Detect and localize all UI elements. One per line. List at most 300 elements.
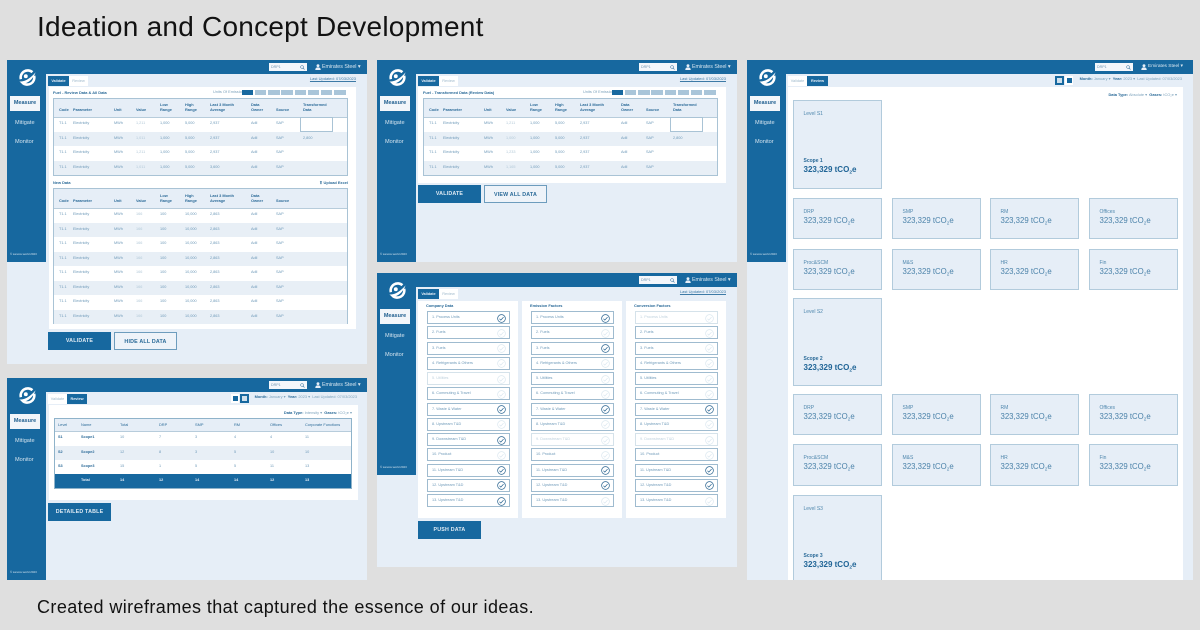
units of emission selector	[583, 89, 716, 95]
sidebar navigation: Measure	[384, 313, 406, 319]
column: emission factors: 2. Fuels	[536, 330, 550, 334]
table: review data: Average	[210, 107, 225, 112]
table: review data: Range	[160, 107, 172, 112]
section heading: new data: New Data	[53, 180, 71, 185]
column: emission factors: 13. Upstream T&D	[536, 498, 567, 502]
sidebar navigation: © sanora world 2023	[380, 465, 407, 469]
table: new data: 166	[136, 284, 142, 288]
column: conversion factors: 1. Process Units	[640, 315, 668, 319]
table: new data: 10,000	[185, 299, 197, 303]
sidebar navigation: Mitigate	[385, 120, 405, 126]
table: transformed data: Range	[530, 107, 542, 112]
table: emissions by scope: RM	[234, 422, 240, 427]
table: review data: Adil	[251, 164, 257, 168]
table: review data: 2,800	[303, 136, 313, 140]
table: review data: Transformed	[303, 102, 327, 107]
column: company data: 6. Commuting & Travel	[432, 391, 471, 395]
table: emissions by scope: 8	[159, 450, 161, 454]
table: new data: Electricity	[73, 270, 89, 274]
table: review data: 1,000	[160, 121, 170, 125]
view toggle icons	[231, 394, 249, 403]
white content card	[418, 87, 726, 183]
table: new data: Adil	[251, 226, 257, 230]
column: company data: 2. Fuels	[432, 330, 446, 334]
table: review data: 1,000	[160, 164, 170, 168]
table: emissions by scope: 4	[234, 435, 236, 439]
card: Offices: 323,329 tCO2e	[1100, 216, 1151, 226]
upload excel link: ⬆ Upload Excel	[319, 180, 348, 185]
card: DRP	[793, 394, 882, 435]
sidebar navigation: Measure	[14, 100, 36, 106]
table: emissions by scope: 14	[120, 478, 124, 482]
table: review data: 1,011	[136, 136, 145, 140]
column: company data: 9. Downstream T&D	[432, 437, 466, 441]
table: emissions by scope: 11	[305, 435, 309, 439]
table: new data: Electricity	[73, 284, 89, 288]
card: SMP: SMP	[902, 405, 913, 411]
card: level s1 scope 1: Scope 1	[804, 158, 823, 164]
detailed table button	[48, 503, 111, 521]
table: new data: 100	[160, 256, 166, 260]
table: emissions by scope: 13	[305, 464, 309, 468]
table: new data: Low	[160, 193, 168, 198]
table: review data: Last 3 Month	[210, 102, 234, 107]
card: Fin: Fin	[1100, 260, 1106, 266]
table: review data: 5,000	[185, 136, 195, 140]
table: emissions by scope: 14	[195, 478, 199, 482]
table: transformed data	[423, 98, 718, 176]
column: emission factors: 11. Upstream T&D	[536, 468, 567, 472]
tabs	[48, 394, 87, 404]
column: company data: 8. Upstream T&D	[432, 422, 461, 426]
table: new data: 100	[160, 270, 166, 274]
table: review data: 3,600	[210, 164, 220, 168]
card: RM: RM	[1000, 405, 1008, 411]
card: level s1 scope 1: Level S1	[804, 111, 823, 117]
card: DRP: DRP	[804, 209, 814, 215]
table: new data: MWh	[114, 314, 123, 318]
table: emissions by scope: 10	[270, 450, 274, 454]
table: new data: 10,000	[185, 270, 197, 274]
card: Fin	[1089, 444, 1178, 486]
table: review data: Data	[303, 107, 311, 112]
tabs	[418, 289, 458, 299]
table: transformed data: High	[555, 102, 564, 107]
table: new data: 166	[136, 299, 142, 303]
table: transformed data: Value	[506, 107, 516, 112]
tabs: Review	[72, 79, 85, 83]
column: conversion factors: 2. Fuels	[640, 330, 654, 334]
table: review data: MWh	[114, 121, 123, 125]
table: new data: Adil	[251, 284, 257, 288]
table: new data: Adil	[251, 241, 257, 245]
table: transformed data: MWh	[484, 150, 493, 154]
card: DRP: 323,329 tCO2e	[804, 412, 855, 422]
column: company data: 13. Upstream T&D	[432, 498, 463, 502]
top bar: DRP1	[271, 64, 281, 68]
column: conversion factors: 12. Upstream T&D	[640, 483, 671, 487]
table: emissions by scope: 15	[120, 464, 124, 468]
table: new data: 100	[160, 284, 166, 288]
top bar	[7, 60, 367, 74]
table: transformed data: Average	[580, 107, 595, 112]
card: Fin: Fin	[1100, 455, 1106, 461]
tabs: Validate	[51, 397, 64, 401]
table: emissions by scope: S2	[58, 450, 63, 454]
table: review data: 2,937	[210, 136, 220, 140]
tabs: Validate	[421, 79, 436, 83]
table: review data: 5,000	[185, 150, 195, 154]
table: new data: 166	[136, 212, 142, 216]
table: new data: 100	[160, 226, 166, 230]
table: transformed data: 5,000	[555, 164, 565, 168]
view all data button	[484, 185, 547, 203]
last updated: Last Updated: 07/03/2023	[680, 289, 726, 294]
column: company data: 3. Fuels	[432, 346, 446, 350]
tabs	[418, 76, 458, 86]
table: transformed data: Last 3 Month	[580, 102, 604, 107]
sidebar navigation	[377, 273, 416, 475]
top bar: Emirates Steel ▾	[692, 64, 731, 70]
table: new data: Adil	[251, 256, 257, 260]
table: emissions by scope: 1	[159, 464, 161, 468]
table: transformed data: Adil	[621, 121, 627, 125]
table: review data: SAP	[276, 150, 284, 154]
table: transformed data: Adil	[621, 150, 627, 154]
table: transformed data: 2,937	[580, 164, 590, 168]
card: M&S: M&S	[902, 260, 913, 266]
table: transformed data: Electricity	[443, 150, 459, 154]
column: conversion factors: 6. Commuting & Travel	[640, 391, 679, 395]
table: transformed data: Range	[555, 107, 567, 112]
table: new data: 100	[160, 314, 166, 318]
table: transformed data: Electricity	[443, 121, 459, 125]
table: new data: 2,863	[210, 241, 220, 245]
top bar: DRP1	[1097, 64, 1107, 68]
column: company data: 12. Upstream T&D	[432, 483, 463, 487]
sidebar navigation: Monitor	[15, 139, 34, 145]
table: transformed data: Code	[429, 107, 439, 112]
table: new data: Owner	[251, 198, 263, 203]
card: M&S: M&S	[902, 455, 913, 461]
table: emissions by scope: 5	[234, 450, 236, 454]
table: transformed data: 1,233	[506, 150, 516, 154]
panel: scope cards wireframe	[747, 60, 1193, 580]
table: new data: Adil	[251, 299, 257, 303]
sidebar navigation: Measure	[754, 100, 776, 106]
table: review data: Data	[251, 102, 259, 107]
validate button	[48, 332, 111, 350]
table: review data: Electricity	[73, 136, 89, 140]
table: review data: Parameter	[73, 107, 92, 112]
table: new data: Electricity	[73, 226, 89, 230]
sidebar navigation: © sanora world 2023	[10, 570, 37, 574]
column: company data: Company Data	[426, 303, 453, 308]
table: review data: 1,211	[136, 150, 145, 154]
table: transformed data: Data	[673, 107, 681, 112]
table: emissions by scope	[54, 418, 352, 489]
table: review data: Electricity	[73, 150, 89, 154]
table: new data: 10,000	[185, 256, 197, 260]
table: transformed data: T1.1	[429, 136, 437, 140]
table: transformed data: T1.1	[429, 121, 437, 125]
card: RM	[990, 198, 1079, 239]
table: review data: Unit	[114, 107, 122, 112]
column: conversion factors: 9. Downstream T&D	[640, 437, 674, 441]
table: emissions by scope: Scope2	[81, 450, 95, 454]
table: new data: 10,000	[185, 314, 197, 318]
table: transformed data: Parameter	[443, 107, 462, 112]
table: new data: 2,863	[210, 314, 220, 318]
table: review data: T1.1	[59, 150, 67, 154]
table: review data: MWh	[114, 136, 123, 140]
table: review data: T1.1	[59, 164, 67, 168]
table: new data: MWh	[114, 212, 123, 216]
table: review data: 5,000	[185, 164, 195, 168]
top bar: Emirates Steel ▾	[692, 277, 731, 283]
card: HR	[990, 444, 1079, 486]
table: transformed data: 5,000	[555, 136, 565, 140]
table: review data: 371	[303, 121, 309, 125]
card: M&S: 323,329 tCO2e	[902, 462, 954, 472]
sidebar navigation	[747, 60, 786, 262]
card: DRP	[793, 198, 882, 239]
table: transformed data: Source	[646, 107, 659, 112]
table: transformed data: 2,800	[673, 136, 683, 140]
top bar: DRP1	[271, 382, 281, 386]
table: emissions by scope: SMP	[195, 422, 203, 427]
table: transformed data: MWh	[484, 136, 493, 140]
panel: fuel review data and all data wireframe	[7, 60, 367, 364]
table: new data: Unit	[114, 198, 122, 203]
column: company data: 7. Waste & Water	[432, 406, 461, 410]
card: RM: 323,329 tCO2e	[1000, 216, 1052, 226]
card: HR: HR	[1000, 260, 1008, 266]
card: M&S	[892, 249, 981, 290]
table: review data: Adil	[251, 150, 257, 154]
card: SMP: SMP	[902, 209, 913, 215]
card: level s1 scope 1: 323,329 tCO2e	[804, 165, 856, 176]
tabs	[48, 76, 88, 86]
table: new data: SAP	[276, 241, 284, 245]
sidebar navigation	[377, 60, 416, 262]
table: new data: SAP	[276, 256, 284, 260]
card: SMP: 323,329 tCO2e	[902, 216, 954, 226]
card: level s2 scope 2	[793, 298, 882, 386]
column: conversion factors	[626, 301, 726, 518]
table: new data: T1.1	[59, 284, 67, 288]
table: new data: Electricity	[73, 299, 89, 303]
table: transformed data: SAP	[646, 121, 654, 125]
card: Offices	[1089, 198, 1178, 239]
table: new data: 166	[136, 256, 142, 260]
table: transformed data: 1,211	[506, 121, 515, 125]
table: new data: SAP	[276, 314, 284, 318]
column: company data: 11. Upstream T&D	[432, 468, 463, 472]
table: transformed data: 2,937	[580, 136, 590, 140]
panel: review summary table wireframe	[7, 378, 367, 580]
column: emission factors: 10. Product	[536, 452, 555, 456]
table: review data: T1.1	[59, 121, 67, 125]
table: transformed data: 1,000	[530, 164, 540, 168]
table: transformed data: Low	[530, 102, 538, 107]
table: review data: T1.1	[59, 136, 67, 140]
card: SMP: 323,329 tCO2e	[902, 412, 954, 422]
column: conversion factors: 3. Fuels	[640, 346, 654, 350]
card: level s3 scope 3: Level S3	[804, 506, 823, 512]
table: review data: 5,000	[185, 121, 195, 125]
column: conversion factors: 11. Upstream T&D	[640, 468, 671, 472]
sidebar navigation: Monitor	[755, 139, 774, 145]
table: new data: Value	[136, 198, 146, 203]
table: review data: 1,000	[160, 136, 170, 140]
card: Fin: 323,329 tCO2e	[1100, 462, 1151, 472]
table: emissions by scope: 12	[120, 450, 124, 454]
table: emissions by scope: 3	[195, 450, 197, 454]
top bar: Emirates Steel ▾	[1148, 64, 1183, 69]
table: emissions by scope: Scope1	[81, 435, 95, 439]
table: transformed data: Data	[621, 102, 629, 107]
table: new data: SAP	[276, 212, 284, 216]
table: new data: Electricity	[73, 241, 89, 245]
table: new data: Parameter	[73, 198, 92, 203]
table: transformed data: 1,165	[506, 164, 516, 168]
table: emissions by scope: Name	[81, 422, 91, 427]
table: new data: Source	[276, 198, 289, 203]
table: review data: Source	[276, 107, 289, 112]
column: conversion factors: Conversion Factors	[634, 303, 671, 308]
sidebar navigation: © sanora world 2023	[750, 252, 777, 256]
table: emissions by scope: 5	[234, 464, 236, 468]
table: emissions by scope: 13	[305, 478, 309, 482]
table: review data: High	[185, 102, 194, 107]
card: Proc&SCM	[793, 249, 882, 290]
table: emissions by scope: Total	[81, 478, 90, 482]
card: M&S	[892, 444, 981, 486]
table: transformed data: 1,000	[530, 121, 540, 125]
table: new data: 166	[136, 314, 142, 318]
card: Fin: 323,329 tCO2e	[1100, 267, 1151, 276]
table: review data: Low	[160, 102, 168, 107]
column: conversion factors: 10. Product	[640, 452, 659, 456]
card: M&S: 323,329 tCO2e	[902, 267, 954, 276]
table: new data: SAP	[276, 284, 284, 288]
title: Ideation and Concept Development	[37, 11, 484, 42]
table: emissions by scope: 10	[120, 435, 124, 439]
table: new data: 2,863	[210, 256, 220, 260]
table: review data: SAP	[276, 121, 284, 125]
data type and gases filters: Data Type: Absolute ▾ Gases: tCO₂e ▾	[1108, 92, 1177, 97]
table: new data: 10,000	[185, 241, 197, 245]
table: transformed data: SAP	[646, 136, 654, 140]
sidebar navigation: Measure	[14, 418, 36, 424]
table: new data	[53, 188, 348, 324]
table: new data: MWh	[114, 299, 123, 303]
card: Offices: 323,329 tCO2e	[1100, 412, 1151, 422]
column: emission factors: 1. Process Units	[536, 315, 564, 319]
column: emission factors: 6. Commuting & Travel	[536, 391, 575, 395]
table: review data: MWh	[114, 150, 123, 154]
table: new data: 2,863	[210, 226, 220, 230]
table: transformed data: T1.1	[429, 164, 437, 168]
sidebar navigation: Monitor	[15, 457, 34, 463]
table: new data: Code	[59, 198, 69, 203]
card: Fin	[1089, 249, 1178, 290]
column: company data: 4. Refrigerants & Others	[432, 361, 473, 365]
top bar	[7, 378, 367, 392]
table: emissions by scope: DRP	[159, 422, 167, 427]
card: DRP: 323,329 tCO2e	[804, 216, 855, 226]
table: emissions by scope: Level	[58, 422, 67, 427]
table: new data: Electricity	[73, 256, 89, 260]
sidebar navigation: Mitigate	[15, 120, 35, 126]
column: emission factors: 12. Upstream T&D	[536, 483, 567, 487]
card: level s1 scope 1	[793, 100, 882, 189]
table: new data: MWh	[114, 226, 123, 230]
table: new data: 166	[136, 241, 142, 245]
card: Offices: Offices	[1100, 209, 1115, 215]
table: transformed data: Unit	[484, 107, 492, 112]
column: emission factors: 7. Waste & Water	[536, 406, 565, 410]
column: company data	[418, 301, 518, 518]
push data button: PUSH DATA	[434, 527, 465, 533]
table: new data: Range	[160, 198, 172, 203]
table: transformed data: Electricity	[443, 164, 459, 168]
card: level s3 scope 3	[793, 495, 882, 584]
card: Proc&SCM: 323,329 tCO2e	[804, 267, 855, 276]
table: new data: 10,000	[185, 212, 197, 216]
table: review data: 2,937	[210, 150, 220, 154]
card: RM: RM	[1000, 209, 1008, 215]
top bar: Emirates Steel ▾	[322, 382, 361, 388]
card: level s2 scope 2: Level S2	[804, 309, 823, 315]
column: conversion factors: 5. Utilities	[640, 376, 656, 380]
table: transformed data: 1,000	[530, 136, 540, 140]
table: new data: High	[185, 193, 194, 198]
tabs: Validate	[791, 79, 804, 83]
table: transformed data: Transformed	[673, 102, 697, 107]
table: review data: Adil	[251, 136, 257, 140]
tabs: Validate	[421, 292, 436, 296]
column: emission factors: 8. Upstream T&D	[536, 422, 565, 426]
sidebar navigation: Mitigate	[755, 120, 775, 126]
caption: Created wireframes that captured the essence of our ideas.	[37, 597, 534, 617]
table: new data: Last 3 Month	[210, 193, 234, 198]
sidebar navigation: Monitor	[385, 352, 404, 358]
table: new data: SAP	[276, 299, 284, 303]
top bar: DRP1	[641, 278, 651, 282]
table: new data: 100	[160, 241, 166, 245]
sidebar navigation	[7, 60, 46, 262]
sidebar navigation: © sanora world 2023	[10, 252, 37, 256]
card: RM	[990, 394, 1079, 435]
table: review data: Code	[59, 107, 69, 112]
table: new data: Adil	[251, 270, 257, 274]
column: company data: 1. Process Units	[432, 315, 460, 319]
units of emission selector: Units Of Emission	[213, 89, 244, 94]
table: new data: T1.1	[59, 314, 67, 318]
card: HR: 323,329 tCO2e	[1000, 462, 1052, 472]
table: emissions by scope: S3	[58, 464, 63, 468]
table: new data: 100	[160, 299, 166, 303]
column: emission factors	[522, 301, 622, 518]
tabs: Review	[442, 292, 455, 296]
table: review data: 1,011	[136, 164, 145, 168]
sidebar navigation: Mitigate	[15, 438, 35, 444]
top bar	[747, 60, 1193, 74]
table: transformed data: MWh	[484, 121, 493, 125]
table: new data: T1.1	[59, 299, 67, 303]
